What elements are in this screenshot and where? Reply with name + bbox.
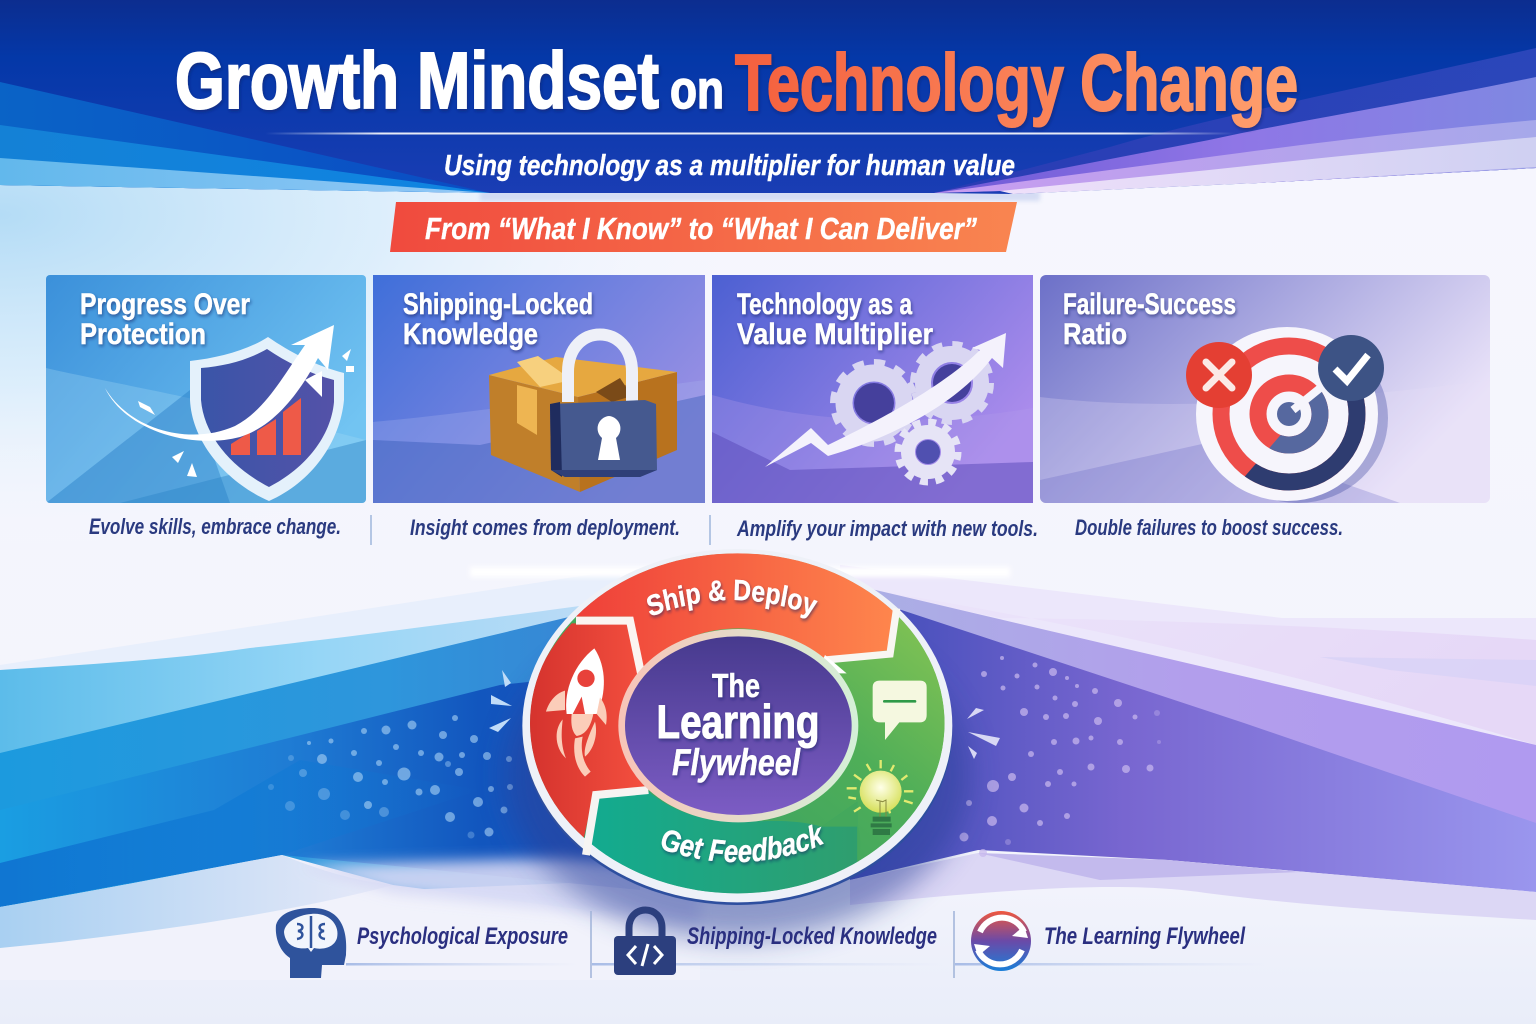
footer item: Psychological Exposure bbox=[276, 908, 578, 978]
card title: Knowledge bbox=[403, 318, 538, 351]
footer item: The Learning Flywheel: The Learning Flywheel bbox=[1044, 923, 1246, 950]
burst marks left of flywheel bbox=[489, 670, 512, 732]
card: Technology as a Value Multiplier bbox=[712, 275, 1033, 503]
card captions: Double failures to boost success. bbox=[1075, 515, 1343, 540]
title underline bbox=[265, 132, 1235, 134]
flywheel diagram bbox=[522, 553, 952, 905]
card title: Ratio bbox=[1063, 318, 1127, 351]
segment: teal feedback arc bbox=[587, 790, 857, 895]
card title: Progress Over bbox=[80, 288, 250, 321]
card title bbox=[80, 288, 250, 351]
card captions: Insight comes from deployment. bbox=[410, 515, 680, 540]
banner: From “What I Know” to “What I Can Deliver” bbox=[425, 211, 977, 246]
arc label: Ship and Deploy: Ship & Deploy bbox=[646, 580, 820, 623]
card title bbox=[1063, 288, 1236, 351]
subtitle: Using technology as a multiplier for human value bbox=[444, 150, 1015, 182]
hub text: Learning bbox=[656, 695, 820, 748]
title: Technology Change bbox=[735, 38, 1298, 127]
card captions bbox=[89, 514, 1343, 541]
hub of the wheel bbox=[618, 629, 858, 822]
footer item: Shipping-Locked Knowledge: Shipping-Locked Knowledge bbox=[687, 923, 937, 950]
icon: target with X and check bbox=[1186, 327, 1388, 503]
segment: red rocket arrow bbox=[527, 623, 647, 843]
card title: Failure-Success bbox=[1063, 288, 1236, 321]
icon: box with padlock bbox=[489, 334, 677, 492]
card title: Value Multiplier bbox=[737, 318, 933, 351]
divider bbox=[590, 911, 592, 978]
card: Failure-Success Ratio bbox=[1040, 275, 1490, 503]
bottom left wave band bbox=[0, 570, 700, 980]
title bbox=[175, 36, 1298, 127]
icon: gears with rising arrow bbox=[765, 333, 1006, 482]
flywheel shadow bbox=[506, 610, 970, 940]
floating particles right bbox=[960, 656, 1161, 857]
icon: speech bubble bbox=[873, 681, 927, 740]
bottom right wave band bbox=[840, 565, 1536, 920]
icon: rocket bbox=[546, 648, 607, 777]
card: Shipping-Locked Knowledge bbox=[373, 275, 705, 503]
floating particles left bbox=[268, 715, 513, 838]
flywheel highlight strip bbox=[470, 567, 1010, 577]
card title bbox=[737, 288, 933, 351]
header wave band bbox=[0, 0, 1536, 201]
burst marks right of flywheel bbox=[967, 708, 1000, 759]
card title: Shipping-Locked bbox=[403, 288, 593, 321]
hub text bbox=[656, 667, 820, 783]
hub text: Flywheel bbox=[672, 742, 801, 783]
arc label: Get Feedback: Get Feedback bbox=[661, 824, 826, 866]
icon: small flywheel bbox=[971, 911, 1031, 971]
card captions: Amplify your impact with new tools. bbox=[736, 516, 1038, 541]
icon: lock with code bbox=[614, 910, 676, 975]
icon: light bulb bbox=[847, 760, 913, 835]
segment: orange ship arc bbox=[576, 553, 893, 666]
card title: Protection bbox=[80, 318, 206, 351]
footer item: The Learning Flywheel bbox=[955, 911, 1265, 971]
card title: Technology as a bbox=[737, 288, 912, 321]
banner bbox=[390, 202, 1017, 252]
icon: shield with rising arrow bbox=[105, 325, 354, 501]
divider bbox=[953, 911, 955, 978]
footer item: Shipping-Locked Knowledge bbox=[592, 910, 942, 975]
title: Growth Mindset bbox=[175, 36, 659, 125]
footer item: Psychological Exposure: Psychological Exposure bbox=[357, 923, 568, 950]
hub text: The bbox=[712, 667, 760, 704]
card captions: Evolve skills, embrace change. bbox=[89, 514, 341, 539]
icon: head with brain bbox=[276, 908, 346, 978]
card title bbox=[403, 288, 593, 351]
card: Progress Over Protection bbox=[46, 275, 366, 503]
title: on bbox=[670, 60, 724, 120]
